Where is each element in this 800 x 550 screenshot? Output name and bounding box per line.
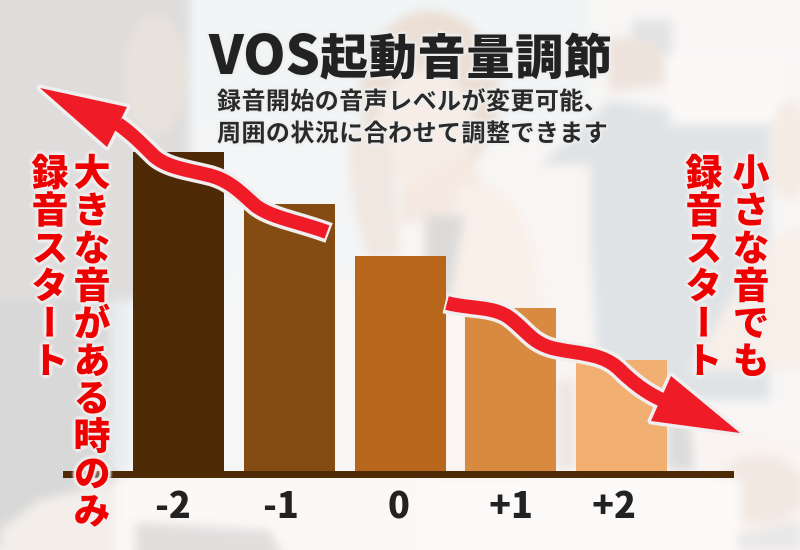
- axis label: 0: 0: [388, 477, 410, 529]
- axis baseline: [63, 471, 734, 478]
- subtitle: [217, 81, 608, 148]
- subtitle: 録音開始の音声レベルが変更可能、: [217, 81, 608, 116]
- bar: 0: [355, 256, 446, 478]
- axis label: -2: -2: [155, 477, 191, 529]
- left caption: recording start: 録音スタート: [26, 153, 67, 379]
- subtitle: 周囲の状況に合わせて調整できます: [217, 113, 608, 148]
- axis label: +2: +2: [592, 477, 636, 529]
- axis label: +1: +1: [489, 477, 533, 529]
- right caption: recording start: 録音スタート: [680, 153, 721, 379]
- bar: +1: [465, 308, 556, 478]
- left caption: large sound only: 大きな音がある時のみ: [68, 153, 109, 529]
- right caption: even small sound: 小さな音でも: [727, 153, 768, 379]
- bar: -2: [133, 152, 224, 478]
- axis label: -1: -1: [263, 477, 299, 529]
- title: VOS起動音量調節: [209, 11, 613, 90]
- bar: +2: [576, 360, 667, 478]
- bar: -1: [244, 204, 335, 478]
